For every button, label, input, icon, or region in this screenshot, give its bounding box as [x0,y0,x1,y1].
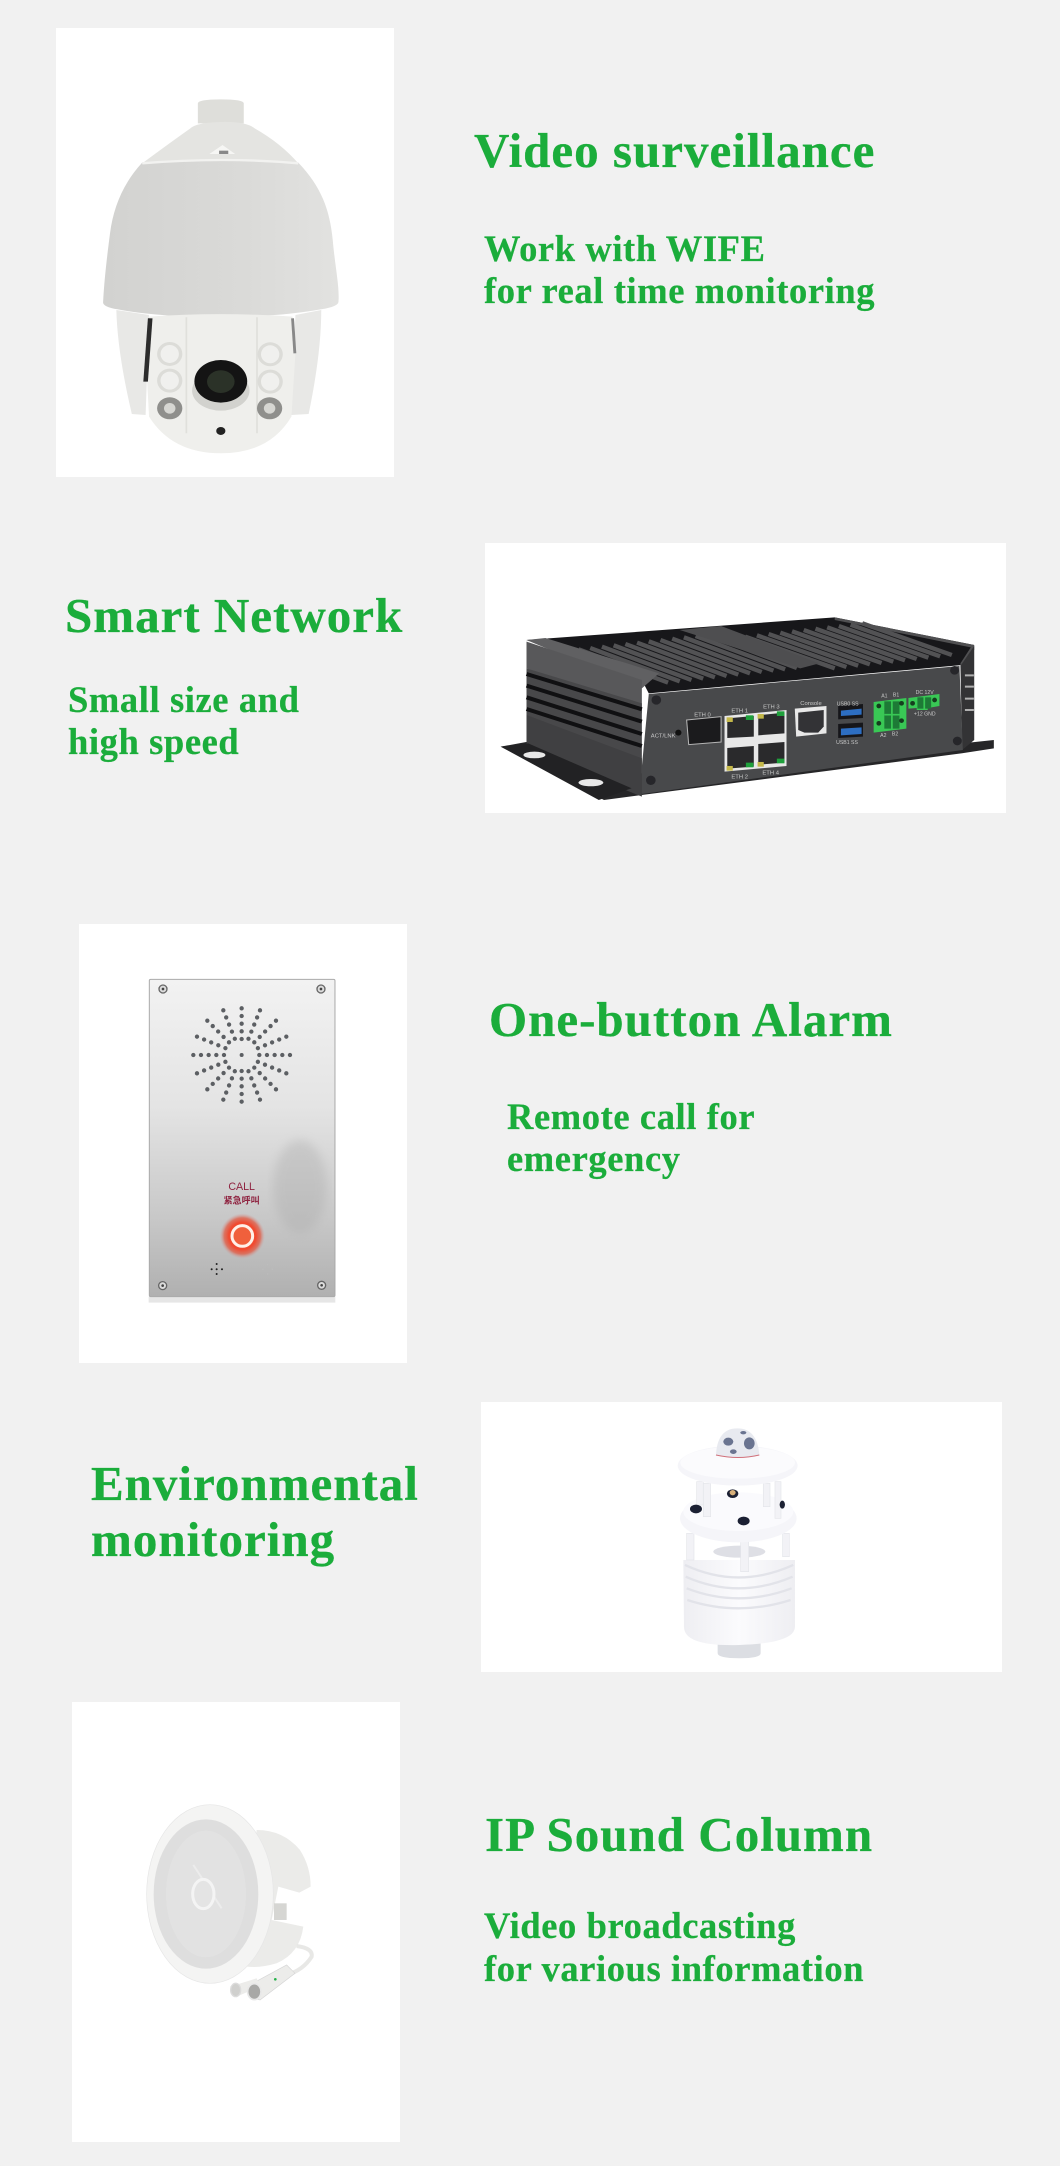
description: Small size and [68,679,299,720]
port labels: +12 GND [914,712,936,718]
heading: IP Sound Column [485,1807,873,1862]
heading: Smart Network [65,588,403,643]
heading [91,1456,419,1567]
description: for various information [484,1948,864,1989]
icon: multi-element weather sensor [678,1428,798,1658]
port labels: Console [800,701,822,707]
description: Work with WIFE [484,228,766,269]
port labels: A2 [880,733,887,739]
icon: emergency call panel: 紧急呼叫 [224,1194,260,1205]
description [507,1096,755,1179]
port labels: B2 [892,731,898,737]
port labels: ACT/LNK [651,733,676,739]
icon: ceiling speaker [147,1805,312,2000]
port labels: ETH 1 [731,708,748,714]
icon: emergency call panel: CALL [228,1181,255,1193]
panel: IP sound column [72,1702,873,2142]
description: high speed [68,721,239,762]
port labels: B1 [893,693,899,699]
port labels: A1 [881,694,888,700]
description [68,679,299,762]
product image card: camera [56,28,394,477]
port labels: USB0 SS [837,701,859,707]
panel: video surveillance [56,28,875,477]
description: Remote call for [507,1096,755,1137]
icon: emergency call panel [149,979,335,1303]
port labels: ETH 0 [694,713,711,719]
product image card: gateway [485,543,1006,813]
panel: smart network [65,543,1006,813]
heading: monitoring [91,1512,335,1567]
port labels: ETH 3 [763,704,780,710]
product image card: speaker [72,1702,400,2142]
icon: fanless network gateway [501,617,994,800]
description: Video broadcasting [484,1905,796,1946]
heading: Video surveillance [474,123,875,178]
product image card: alarm [79,924,407,1363]
port labels: USB1 SS [836,740,859,746]
panel: one-button alarm [79,924,893,1363]
product image card: weather sensor [481,1402,1002,1672]
icon: PTZ dome camera [103,99,339,453]
port labels: ETH 4 [762,771,780,777]
port labels: DC 12V [916,690,934,696]
heading: Environmental [91,1456,419,1511]
description [484,1905,864,1989]
port labels: ETH 2 [731,775,748,781]
heading: One-button Alarm [489,992,893,1047]
description [484,228,875,311]
description: for real time monitoring [484,270,875,311]
port labels [651,690,936,781]
description: emergency [507,1138,681,1179]
panel: environmental monitoring [91,1402,1002,1672]
